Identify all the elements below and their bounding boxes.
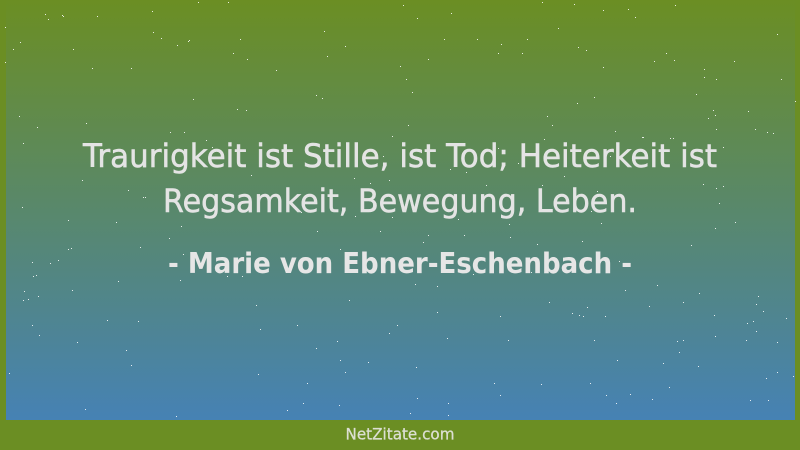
quote text: Regsamkeit, Bewegung, Leben.: [163, 182, 637, 220]
quote text: [82, 137, 717, 220]
author: - Marie von Ebner-Eschenbach -: [168, 247, 632, 280]
footer brand: NetZitate.com: [346, 424, 454, 444]
quote text: Traurigkeit ist Stille, ist Tod; Heiterkeit ist: [82, 137, 717, 175]
